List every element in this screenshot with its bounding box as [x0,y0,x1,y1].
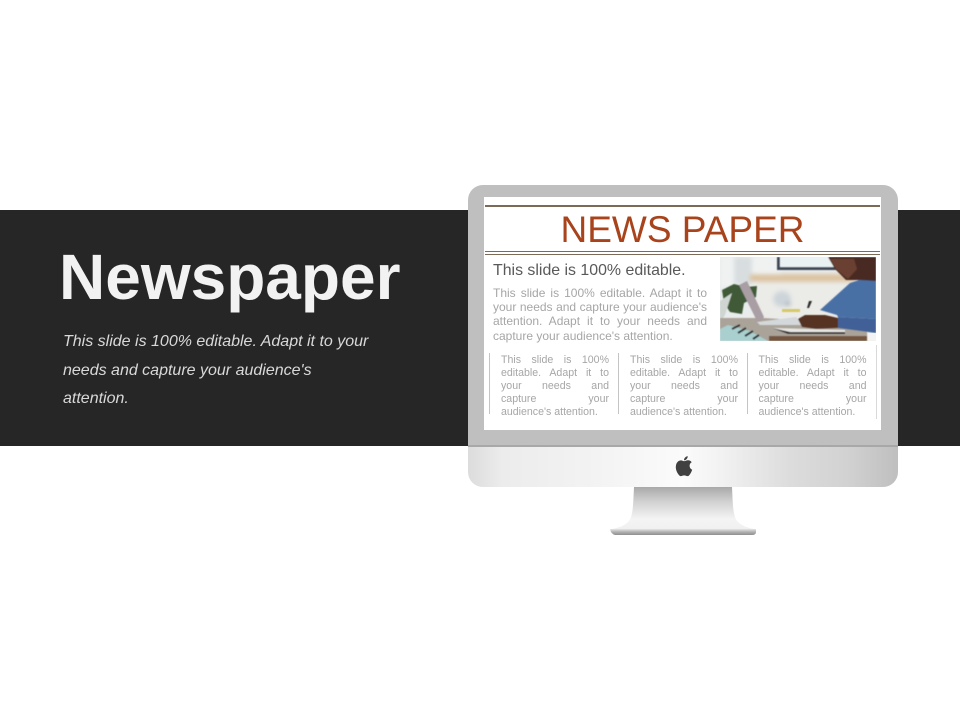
text column 2: This slide is 100% [630,354,738,366]
text column 2: capture your [630,393,738,405]
article paragraph [493,286,707,343]
text column 2: editable. Adapt it to [630,367,738,379]
description text: needs and capture your audience's [63,362,312,379]
screen [484,197,881,430]
monitor chin [468,447,898,487]
article paragraph: capture your audience's attention. [493,329,673,343]
text column 2 [630,354,738,418]
text column 3: This slide is 100% [758,354,866,366]
dark band [0,210,960,446]
description text: attention. [63,390,129,407]
newspaper headline: NEWS PAPER [561,209,804,250]
double rule [485,251,880,255]
article heading: This slide is 100% editable. [493,262,686,279]
text column 1: audience's attention. [501,406,598,418]
article paragraph: your needs and capture your audience's [493,300,707,314]
text column 3 [758,354,866,418]
article photo [720,257,876,341]
text column 3: your needs and [758,380,866,392]
bezel base line [468,445,898,447]
text column 3: audience's attention. [758,406,855,418]
text column 3: editable. Adapt it to [758,367,866,379]
text column 1: capture your [501,393,609,405]
article paragraph: attention. Adapt it to your needs and [493,314,707,328]
text column 1: editable. Adapt it to [501,367,609,379]
icon: apple logo [676,456,692,476]
monitor bezel [468,185,898,446]
monitor stand [610,487,756,535]
text column 1 [501,354,609,418]
text column 2: audience's attention. [630,406,727,418]
top rule [485,205,880,207]
title: Newspaper [59,241,400,313]
monitor [468,185,898,535]
description text: This slide is 100% editable. Adapt it to your [63,333,368,350]
description text [63,333,369,407]
text column 3: capture your [758,393,866,405]
text column 1: This slide is 100% [501,354,609,366]
column dividers [489,345,877,419]
text column 2: your needs and [630,380,738,392]
text column 1: your needs and [501,380,609,392]
article paragraph: This slide is 100% editable. Adapt it to [493,286,707,300]
